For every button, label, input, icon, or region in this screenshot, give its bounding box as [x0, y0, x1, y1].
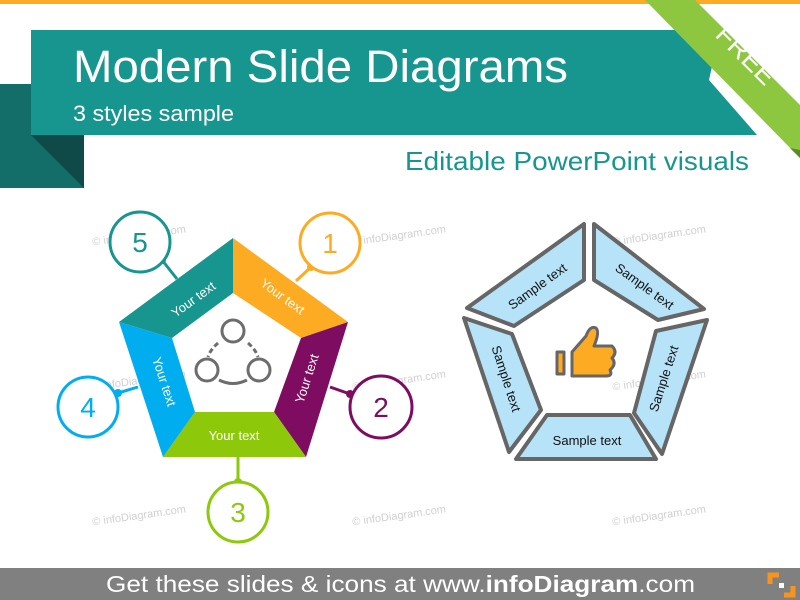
icon: logo corners: [770, 575, 793, 595]
header banner: [0, 0, 800, 188]
watermarks: © infoDiagram.com: [612, 368, 707, 394]
left pentagon diagram: 4: [80, 392, 96, 423]
watermarks: © infoDiagram.com: [612, 503, 707, 529]
segments: [233, 238, 348, 338]
watermarks: © infoDiagram.com: [92, 368, 187, 394]
title: Modern Slide Diagrams: [73, 41, 568, 92]
ribbon text FREE: FREE: [710, 19, 782, 91]
watermarks: © infoDiagram.com: [612, 223, 707, 249]
icon: team circles: [196, 320, 270, 384]
right sketch pentagon diagram: Sample text: [505, 260, 570, 313]
circles: [58, 212, 412, 542]
right sketch pentagon diagram: Sample text: [646, 343, 682, 414]
top orange bar: [0, 0, 800, 4]
subtitle: 3 styles sample: [73, 101, 234, 126]
left pentagon diagram: Your text: [209, 428, 260, 443]
watermarks: © infoDiagram.com: [352, 223, 447, 249]
connectors: [114, 256, 354, 486]
left pentagon diagram: 1: [322, 228, 338, 259]
right sketch pentagon diagram: Sample text: [553, 433, 622, 448]
left pentagon diagram: 3: [230, 497, 246, 528]
left pentagon diagram: Your text: [168, 278, 219, 320]
footer: Get these slides & icons at www. infoDiagram .com: [106, 571, 695, 597]
watermarks: © infoDiagram.com: [92, 223, 187, 249]
footer: [0, 568, 800, 600]
right sketch pentagon diagram: Sample text: [489, 344, 524, 414]
right sketch pentagon diagram: Sample text: [612, 260, 677, 313]
left pentagon diagram: 2: [373, 392, 389, 423]
tagline: Editable PowerPoint visuals: [405, 146, 749, 176]
left pentagon diagram: 5: [132, 227, 148, 258]
watermarks: © infoDiagram.com: [92, 503, 187, 529]
left pentagon diagram: Your text: [258, 275, 308, 318]
left pentagon diagram: Your text: [149, 355, 179, 408]
watermarks: © infoDiagram.com: [352, 503, 447, 529]
icon: thumbs up: [557, 327, 615, 376]
watermarks: © infoDiagram.com: [352, 368, 447, 394]
left pentagon diagram: Your text: [292, 352, 322, 405]
